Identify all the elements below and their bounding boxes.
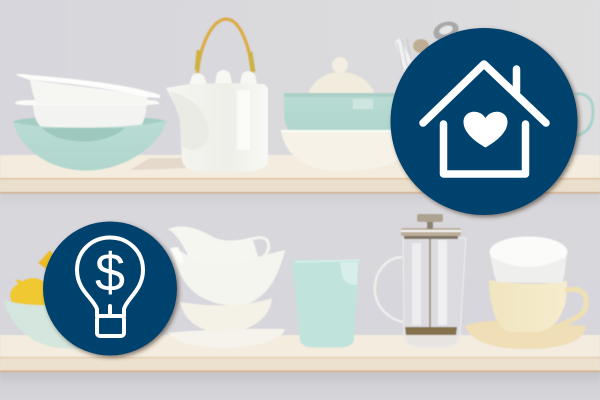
teal mug [292,260,360,348]
badge circle [43,222,177,356]
gravy boats, bowl and saucer [168,226,285,348]
french press [375,214,466,347]
badge circle [390,28,578,215]
dollar sign: $ [95,243,125,303]
teapot [166,19,268,172]
white stacked bowls [15,74,160,128]
lemons [10,250,60,306]
cutlery [395,18,461,72]
bottom shelf [0,335,600,372]
lemon bowl [4,300,80,349]
teal mug handle [574,94,593,136]
teal bowl [13,120,167,171]
icon badge: house with heart [390,28,578,215]
white cup [490,236,568,283]
house icon [423,64,546,174]
cream saucer and cup [465,280,586,349]
lidded pot, teal and cream bowls [281,57,400,171]
top shelf [0,155,600,194]
teal bowl back rim [13,116,167,128]
icon badge: light bulb with dollar sign [43,222,177,356]
heart [464,112,508,148]
bulb icon [77,238,143,336]
